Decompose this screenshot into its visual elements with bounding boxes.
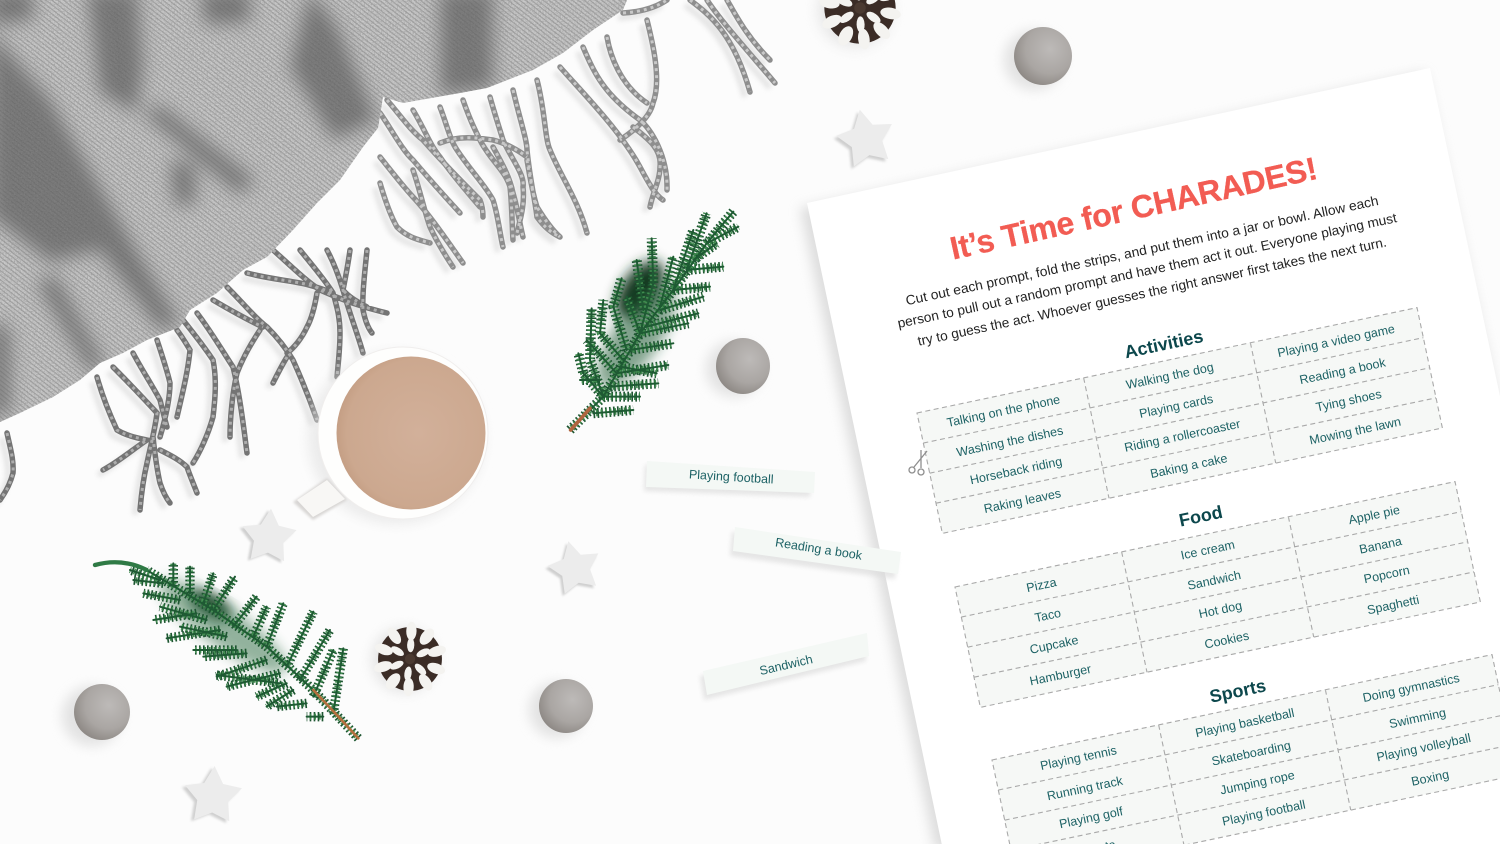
table: Activities — [917, 308, 1442, 533]
table: Food: Spaghetti — [1366, 593, 1420, 617]
printed sheet — [807, 68, 1500, 844]
table: Sports: Swimming — [1388, 706, 1447, 731]
star bottom — [180, 764, 243, 824]
heading: Activities: Activities — [1123, 326, 1205, 362]
table: Activities: Talking on the phone — [946, 392, 1061, 430]
table: Food: Taco — [1034, 606, 1062, 625]
table: Food: Banana — [1358, 534, 1403, 557]
table: Sports: Running track — [1046, 774, 1125, 803]
table: Sports: Jumping rope — [1219, 768, 1296, 797]
table: Sports — [992, 655, 1500, 844]
heading: Sports: Sports — [1208, 675, 1268, 707]
star centre — [540, 535, 606, 598]
table: Activities: Riding a rollercoaster — [1123, 417, 1242, 455]
table: Food: Hot dog — [1198, 598, 1243, 621]
paper strip: Playing football — [644, 461, 815, 497]
table: Food: Hamburger — [1028, 662, 1092, 688]
table: Sports: Playing golf — [1058, 804, 1125, 831]
table: Activities: Washing the dishes — [955, 423, 1064, 460]
paper strip: Reading a book: Reading a book — [774, 535, 864, 563]
grey wool scarf — [0, 0, 680, 430]
table: Food: Cupcake — [1028, 633, 1080, 657]
pine cone top — [812, 0, 908, 56]
table: Food: Ice cream — [1180, 538, 1236, 563]
felt ball lower left — [62, 684, 130, 746]
title: It’s Time for CHARADES! — [947, 150, 1321, 266]
icon: scissors — [909, 450, 927, 475]
paper strip: Sandwich — [700, 633, 869, 700]
felt ball top — [1004, 27, 1072, 90]
table: Sports: Playing volleyball — [1375, 731, 1472, 764]
coffee mug — [293, 347, 488, 524]
table: Sports: Boxing — [1410, 767, 1450, 789]
evergreen sprig upper — [570, 212, 738, 430]
table: Activities: Tying shoes — [1315, 387, 1383, 414]
scarf fringe — [0, 0, 775, 515]
table: Sports: Skateboarding — [1210, 738, 1292, 769]
table: Food: Sandwich — [1186, 568, 1242, 593]
felt ball lower centre — [529, 679, 593, 738]
evergreen sprig lower — [95, 562, 358, 738]
heading: Food: Food — [1177, 502, 1224, 530]
table: Activities: Horseback riding — [969, 454, 1063, 487]
paper strip: Sandwich: Sandwich — [758, 652, 814, 678]
table: Sports: Playing football — [1221, 798, 1307, 829]
table: Food — [955, 482, 1480, 707]
table: Activities: Reading a book — [1298, 355, 1388, 387]
felt ball centre — [706, 338, 770, 397]
star by mug — [237, 506, 298, 564]
table: Food: Popcorn — [1363, 563, 1411, 586]
table: Activities: Baking a cake — [1149, 451, 1229, 481]
table: Sports: Playing tennis — [1039, 743, 1118, 773]
table: Food: Pizza — [1025, 575, 1058, 595]
table: Sports: Playing basketball — [1194, 706, 1296, 740]
table: Activities: Walking the dog — [1125, 360, 1215, 392]
instructions: try to guess the act. Whoever guesses the right answer first takes the next turn. — [916, 234, 1388, 349]
star top — [829, 104, 899, 171]
table: Food: Apple pie — [1347, 503, 1401, 527]
instructions: person to pull out a random prompt and have them act it out. Everyone playing must — [896, 210, 1398, 331]
paper strip: Reading a book — [730, 527, 901, 579]
table: Sports: Doing gymnastics — [1361, 671, 1461, 705]
pine cone bottom — [361, 611, 458, 707]
table: Activities: Raking leaves — [983, 486, 1062, 516]
table: Activities: Playing a video game — [1276, 322, 1396, 360]
paper shadow — [800, 72, 1500, 844]
table: Activities: Mowing the lawn — [1308, 415, 1402, 447]
paper strip: Playing football: Playing football — [689, 467, 774, 487]
table: Activities: Playing cards — [1138, 392, 1214, 421]
instructions: Cut out each prompt, fold the strips, and put them into a jar or bowl. Allow each — [904, 193, 1380, 308]
table: Food: Cookies — [1203, 629, 1250, 652]
